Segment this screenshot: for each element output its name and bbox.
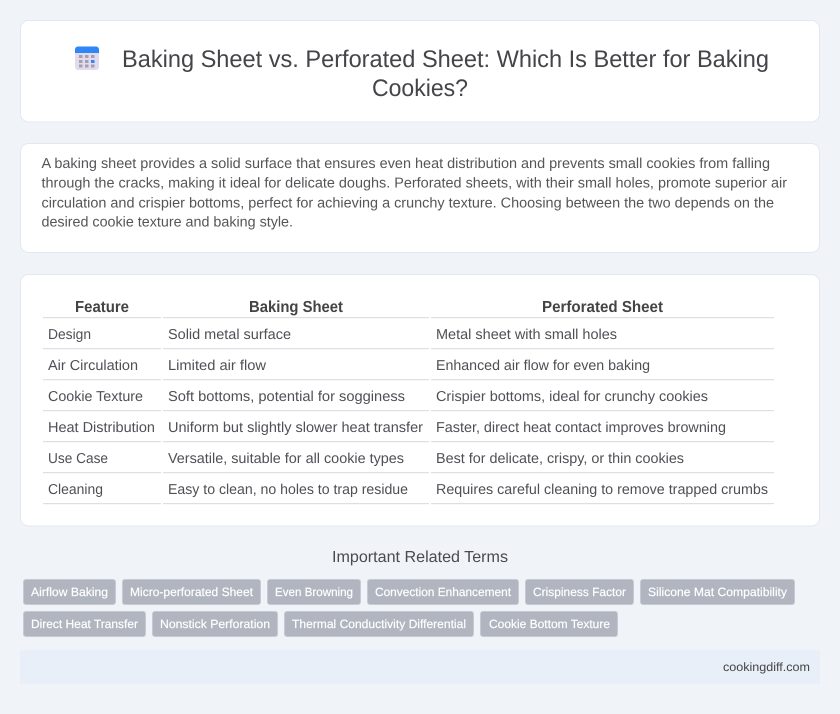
row: heat distribution: Faster, direct heat contact improves browning (436, 420, 726, 436)
row: air circulation (48, 358, 650, 374)
table header row: Baking Sheet (249, 299, 344, 316)
panel: intro text: A baking sheet provides a solid surface that ensures even heat distribution and prevents small cookies from falling (42, 156, 770, 172)
heading: important related terms: Important Related Terms (332, 549, 508, 566)
table header row: Perforated Sheet (542, 299, 664, 316)
row: air circulation: Limited air flow (168, 358, 267, 374)
tag list: Nonstick Perforation (160, 617, 270, 631)
row: heat distribution (48, 420, 726, 436)
row: cleaning: Cleaning (48, 482, 103, 498)
row: cookie texture: Cookie Texture (48, 389, 143, 405)
tag list: Silicone Mat Compatibility (648, 585, 787, 599)
panel: intro text: desired cookie texture and baking style. (42, 214, 293, 230)
row: design: Metal sheet with small holes (436, 327, 617, 343)
row: design: Solid metal surface (168, 327, 291, 343)
row: use case (48, 451, 684, 467)
row: use case: Use Case (48, 451, 108, 467)
header panel (20, 20, 820, 122)
icon: calendar (75, 46, 99, 70)
tag list: Direct Heat Transfer (31, 617, 138, 631)
row: cleaning: Easy to clean, no holes to trap residue (168, 482, 408, 498)
tag list: Convection Enhancement (375, 585, 512, 599)
table header row: Feature (75, 299, 129, 316)
footer (20, 650, 820, 684)
row: cleaning (48, 482, 768, 498)
title (122, 46, 769, 102)
tag list: Crispiness Factor (533, 585, 626, 599)
row: cookie texture (48, 389, 708, 405)
row: air circulation: Enhanced air flow for even baking (436, 358, 650, 374)
row: heat distribution: Uniform but slightly slower heat transfer (168, 420, 423, 436)
footer: cookingdiff.com (723, 660, 810, 674)
row: design: Design (48, 327, 91, 343)
panel: intro text (20, 144, 820, 252)
panel: comparison table (20, 274, 820, 526)
row: cookie texture: Soft bottoms, potential for sogginess (168, 389, 405, 405)
row: design (48, 327, 617, 343)
title: Baking Sheet vs. Perforated Sheet: Which Is Better for Baking (122, 46, 769, 73)
tag list: Micro-perforated Sheet (130, 585, 254, 599)
tag list: Cookie Bottom Texture (489, 617, 610, 631)
row: cookie texture: Crispier bottoms, ideal for crunchy cookies (436, 389, 708, 405)
panel: intro text: circulation and crispier bottoms, perfect for achieving a crunchy texture. Choosing between the two depends on the (42, 196, 774, 212)
table header row (75, 299, 664, 316)
tag list (24, 580, 794, 636)
row: air circulation: Air Circulation (48, 358, 138, 374)
row: cleaning: Requires careful cleaning to remove trapped crumbs (436, 482, 768, 498)
row: use case: Versatile, suitable for all cookie types (168, 451, 404, 467)
row: use case: Best for delicate, crispy, or thin cookies (436, 451, 684, 467)
row: heat distribution: Heat Distribution (48, 420, 155, 436)
tag list: Airflow Baking (31, 585, 108, 599)
tag list: Thermal Conductivity Differential (292, 617, 466, 631)
tag list: Even Browning (275, 585, 353, 599)
title: Cookies? (372, 75, 468, 102)
panel: intro text: through the cracks, making it ideal for delicate doughs. Perforated sheets, with their small holes, promote superior air (42, 176, 787, 192)
